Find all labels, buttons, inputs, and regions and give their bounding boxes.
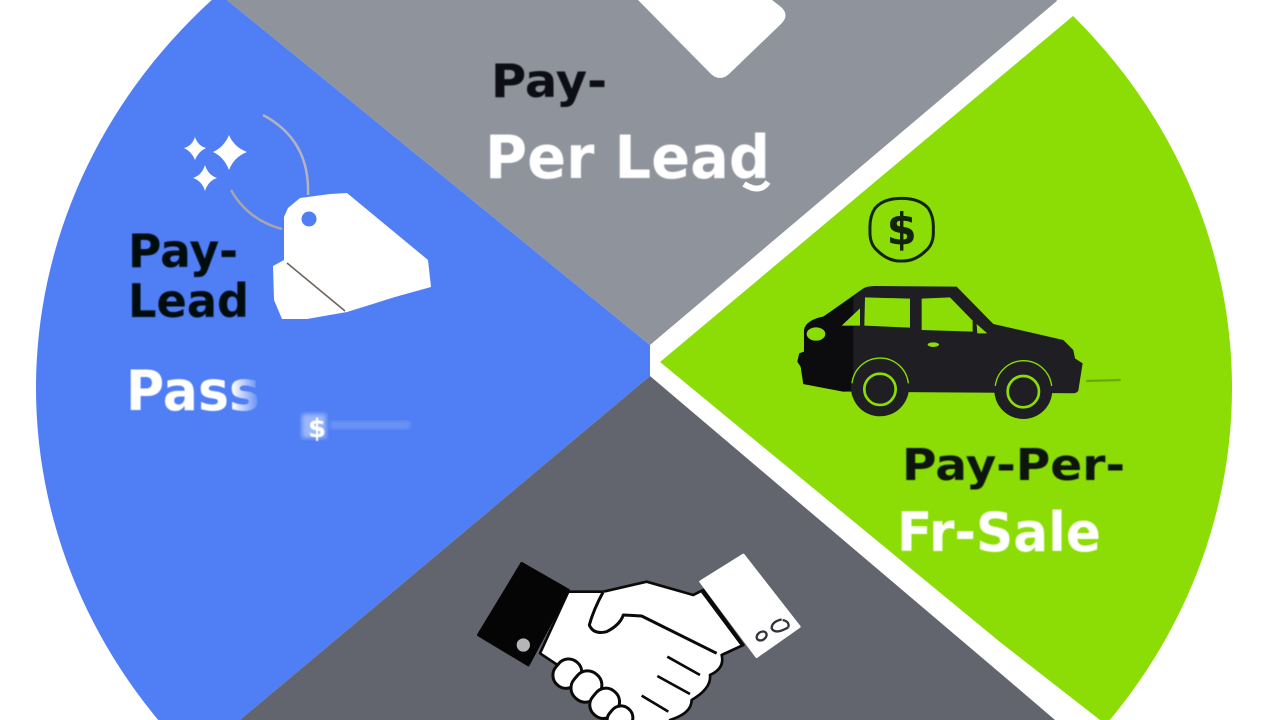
panel: blue segment (0, 0, 650, 720)
panel: light grey segment (227, 0, 1058, 345)
icon: car (797, 286, 1121, 419)
blurred price label: $ (308, 414, 326, 444)
icon: white card at top (638, 0, 786, 78)
icon: dollar coin: $ (887, 205, 917, 255)
panel: dark grey segment (240, 376, 1055, 720)
heading: Pay-Lead: Pay- (128, 224, 238, 278)
heading: Pay-Lead (128, 224, 249, 328)
heading: Fr-Sale: Fr-Sale (897, 501, 1101, 564)
panel: green segment (660, 0, 1280, 720)
icon: dollar coin (870, 198, 933, 261)
icon: sparkles (184, 135, 247, 191)
heading: Per Lead: Per Lead (485, 123, 770, 193)
icon: handshake (478, 555, 799, 720)
heading: Pay-: Pay- (491, 54, 607, 108)
heading: Pay-Lead: Lead (128, 274, 249, 328)
white cuff (701, 555, 799, 657)
heading: Pay-Per-: Pay-Per- (902, 440, 1125, 491)
heading: Pass: Pass (126, 359, 260, 423)
blurred price label (302, 414, 410, 444)
icon: price tag (231, 115, 431, 319)
black cuff (478, 563, 568, 665)
